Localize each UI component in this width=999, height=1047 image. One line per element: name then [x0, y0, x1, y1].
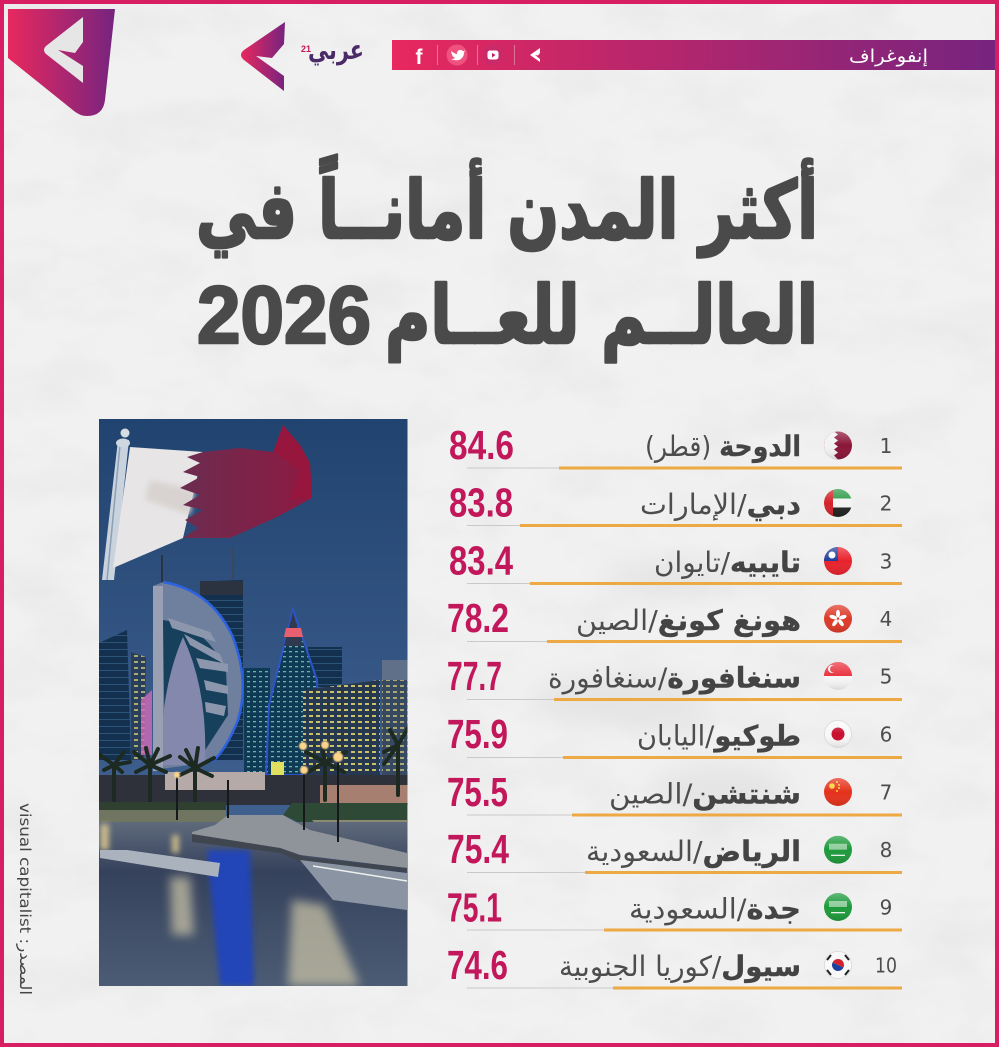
row 5: Singapore: 5	[880, 664, 892, 688]
row 10: Seoul: 74.6	[447, 942, 508, 988]
row 8: Riyadh	[448, 834, 902, 874]
flag: UAE	[824, 489, 852, 517]
flag: Japan	[824, 720, 852, 748]
row 1: Doha: 84.6	[449, 422, 514, 468]
row 4: Hong Kong: 78.2	[447, 595, 509, 641]
palm trees	[100, 725, 410, 802]
mid building	[244, 668, 270, 774]
row 3: Taipei: تايبيه/تايوان	[654, 546, 801, 579]
icon: youtube	[483, 45, 503, 65]
row 8: Riyadh: 8	[880, 838, 892, 862]
row 9: Jeddah: 9	[880, 896, 892, 920]
row 8: Riyadh: الرياض/السعودية	[586, 835, 801, 868]
flag: Saudi Arabia	[824, 893, 852, 921]
row 7: Shenzhen: 7	[880, 780, 892, 804]
bar label: إنفوغراف	[849, 46, 928, 67]
hedges	[99, 802, 226, 810]
back tower	[161, 547, 243, 760]
corner logo badge	[8, 9, 115, 116]
icon: facebook: f	[416, 46, 424, 69]
row 8: Riyadh: 75.4	[447, 826, 509, 872]
header bar	[392, 40, 995, 70]
row 1: Doha	[450, 430, 902, 470]
brand logo	[241, 22, 364, 91]
brand number: 21	[301, 44, 311, 54]
row 9: Jeddah: 75.1	[447, 884, 502, 930]
title	[196, 153, 818, 363]
row 3: Taipei: 3	[880, 550, 892, 574]
icon: twitter	[446, 44, 468, 66]
title year: 2026	[197, 270, 371, 361]
row 9: Jeddah: جدة/السعودية	[629, 892, 801, 926]
flag: Singapore	[824, 662, 852, 690]
water	[99, 822, 408, 987]
pyramid tower	[266, 610, 320, 775]
row 7: Shenzhen: شنتشن/الصين	[609, 778, 801, 810]
flag: Saudi Arabia	[824, 836, 852, 864]
flag pole	[102, 428, 130, 580]
flag: Qatar	[824, 432, 852, 460]
flag: China	[824, 778, 852, 806]
Qatar flag	[113, 425, 312, 568]
flag: Taiwan	[824, 547, 852, 575]
row 4: Hong Kong	[448, 604, 902, 643]
row 2: Dubai	[450, 488, 902, 527]
floating slabs	[100, 850, 220, 877]
walkway	[192, 815, 407, 868]
row 2: Dubai: 2	[880, 492, 892, 516]
row 5: Singapore: 77.7	[447, 653, 502, 699]
row 6: Tokyo: 6	[880, 722, 892, 746]
row 2: Dubai: 83.8	[449, 480, 513, 526]
row 1: Doha: 1	[880, 434, 892, 458]
left towers	[99, 630, 131, 760]
row 6: Tokyo: 75.9	[447, 711, 508, 757]
row 2: Dubai: دبي/الإمارات	[640, 488, 801, 521]
flag: Hong Kong	[824, 605, 852, 633]
icon: corner chevron mark	[44, 17, 83, 83]
right buildings	[303, 680, 380, 775]
title line 1: أكثر المدن أمانــاً في	[196, 153, 818, 258]
row 3: Taipei	[450, 546, 902, 585]
row 4: Hong Kong: 4	[880, 607, 892, 631]
row 9: Jeddah	[448, 893, 902, 932]
street lamps	[174, 741, 343, 842]
row 6: Tokyo	[448, 720, 902, 759]
row 3: Taipei: 83.4	[449, 538, 513, 584]
flag: South Korea	[824, 951, 852, 979]
source credit: المصدر: visual capitalist	[16, 803, 34, 995]
row 1: Doha: الدوحة (قطر)	[645, 430, 801, 463]
row 10: Seoul: 10	[875, 954, 897, 978]
icon: small chevron	[530, 48, 540, 62]
row 10: Seoul: سيول/كوريا الجنوبية	[559, 950, 801, 983]
row 7: Shenzhen: 75.5	[447, 769, 508, 815]
low pavilion	[99, 775, 419, 805]
crescent tower	[153, 582, 243, 771]
ranking list	[447, 422, 902, 990]
row 5: Singapore	[448, 662, 902, 701]
brand name: عربي	[308, 35, 364, 66]
water reflections	[100, 824, 360, 986]
title line 2: العالــم للعــام	[385, 269, 818, 363]
row 10: Seoul	[448, 950, 902, 990]
photo: Doha skyline with Qatar flag	[99, 419, 419, 987]
row 6: Tokyo: طوكيو/اليابان	[637, 720, 801, 752]
row 4: Hong Kong: هونغ كونغ/الصين	[576, 604, 801, 637]
icon: brand chevron	[241, 22, 285, 91]
row 7: Shenzhen	[448, 778, 902, 816]
row 5: Singapore: سنغافورة/سنغافورة	[548, 662, 801, 694]
